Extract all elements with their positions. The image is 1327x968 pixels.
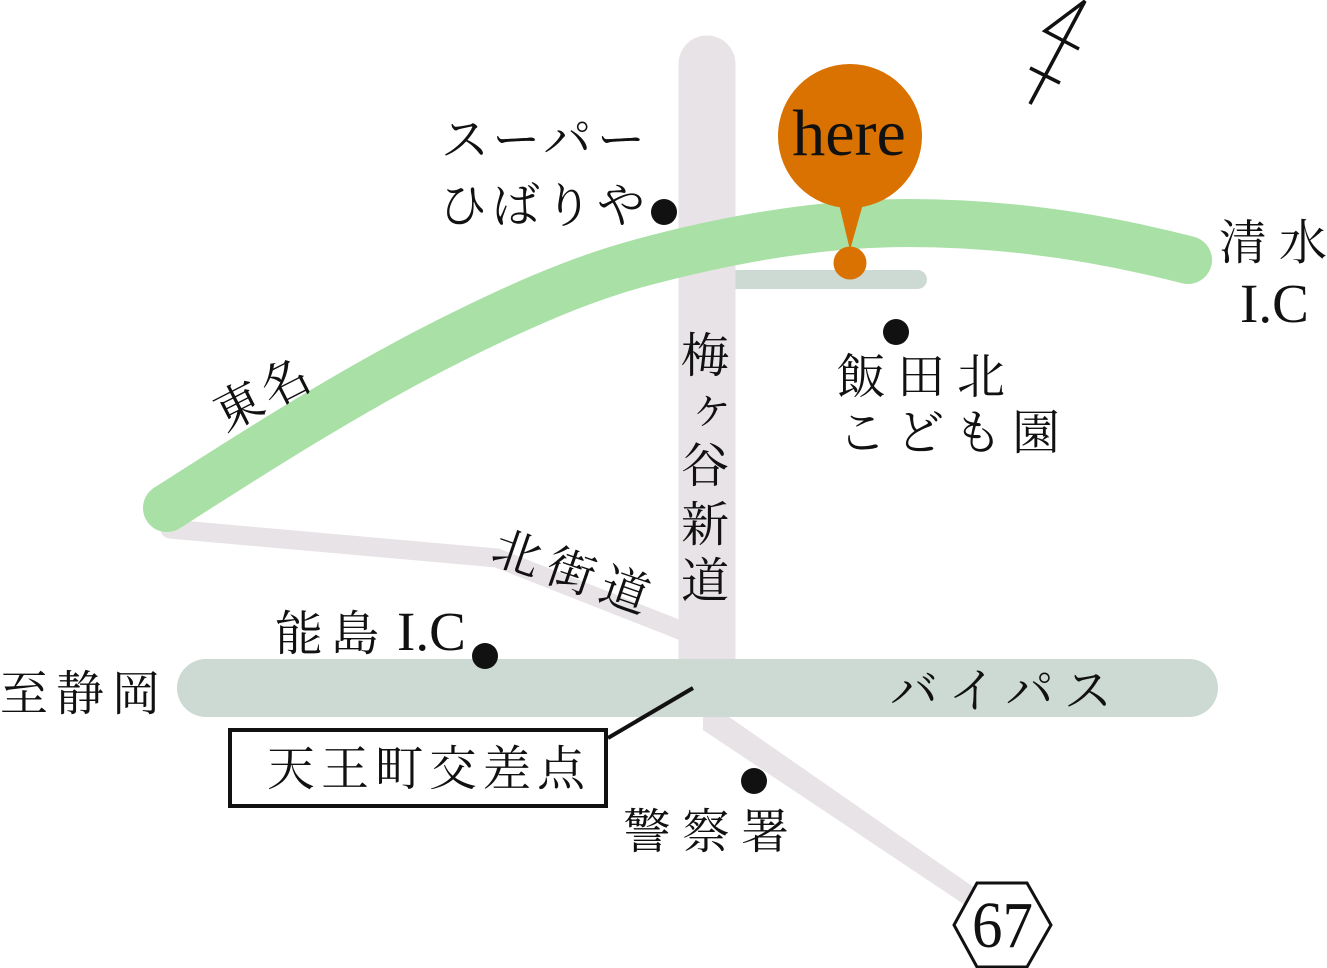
road: Umegaya Shindo vertical [678, 64, 736, 680]
label: Shimizu IC [1219, 217, 1327, 334]
icon: north arrow [1030, 1, 1085, 104]
road: route 67 [703, 712, 985, 905]
icon: route 67: 67 [972, 889, 1033, 962]
label: supermarket: ひばりや [439, 180, 645, 233]
label: Tomei: 東名 [206, 349, 319, 442]
icon: route 67 [954, 883, 1051, 967]
label: Shimizu IC: I.C [1240, 273, 1309, 334]
label: Nojima IC: 能島 [275, 608, 379, 661]
road: bypass [177, 659, 1218, 717]
label: kindergarten [837, 351, 1060, 460]
label: Nojima IC: I.C [397, 601, 466, 662]
label: police: 警察署 [623, 806, 789, 859]
label: kindergarten: こども園 [838, 407, 1060, 460]
label: Umegaya Shindo: 新 [681, 499, 729, 552]
road: side street [720, 270, 918, 289]
marker: supermarket [651, 199, 677, 225]
callout: Tenno-cho intersection [230, 688, 693, 806]
label: to Shizuoka: 至静岡 [0, 668, 160, 721]
label: kindergarten: 飯田北 [837, 351, 1005, 404]
label: Nojima IC [275, 601, 466, 662]
label: supermarket: スーパー [441, 114, 645, 167]
label: Umegaya Shindo: 梅 [681, 330, 729, 383]
road: Tomei expressway [167, 223, 1188, 508]
label: Umegaya Shindo: ヶ [688, 381, 736, 434]
marker: Nojima IC [472, 643, 498, 669]
road: Kitakaido [170, 529, 690, 634]
label: Umegaya Shindo: 谷 [681, 440, 729, 493]
label: supermarket [439, 114, 645, 233]
marker: police [741, 768, 767, 794]
callout: Tenno-cho intersection: 天王町交差点 [267, 743, 586, 796]
label: Umegaya Shindo [681, 330, 736, 608]
label: bypass: バイパス [890, 665, 1112, 718]
label: Shimizu IC: 清水 [1219, 217, 1327, 270]
pin: here [778, 64, 922, 280]
label: Umegaya Shindo: 道 [681, 555, 729, 608]
label: Kitakaido: 北街道 [485, 521, 656, 624]
pin: here: here [792, 97, 906, 170]
marker: kindergarten [883, 319, 909, 345]
